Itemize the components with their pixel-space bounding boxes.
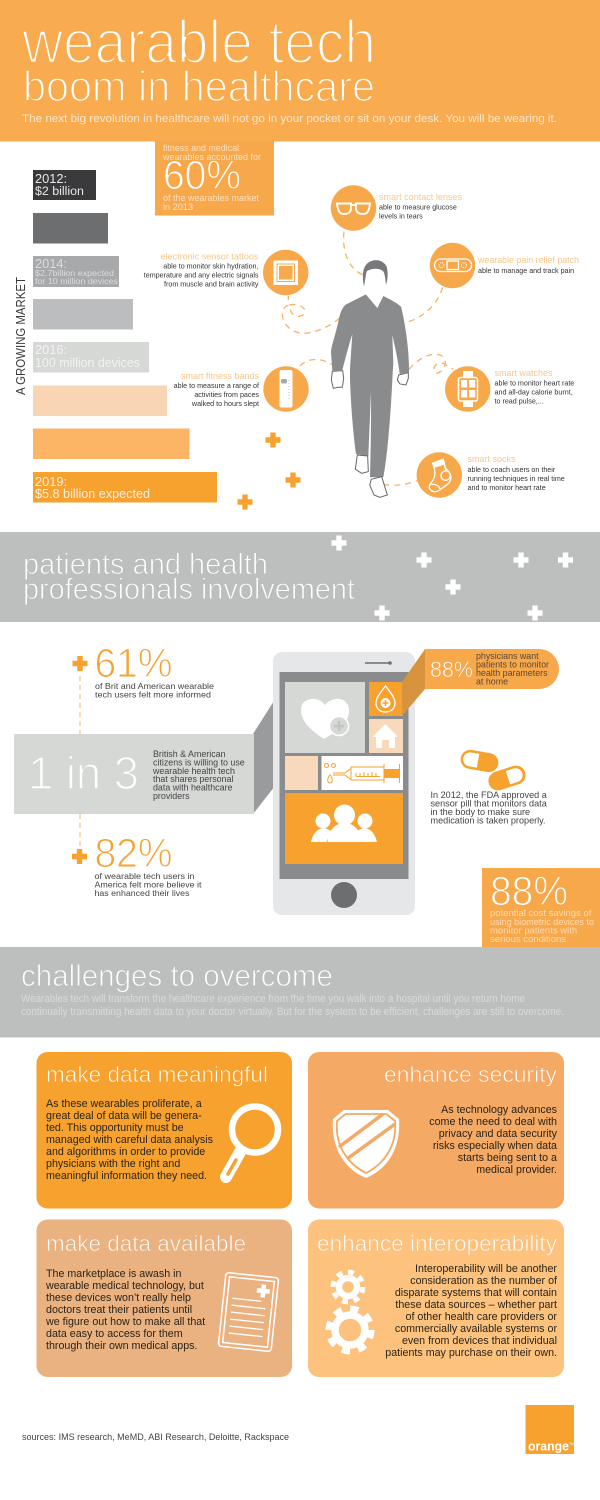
feature: smart watches: to read pulse,... bbox=[494, 398, 544, 406]
panel: make data available: make data available bbox=[46, 1231, 246, 1256]
feature: smart socks: running techniques in real time bbox=[468, 475, 565, 483]
body text: through their own medical apps. bbox=[46, 1340, 198, 1352]
body text: patients may purchase on their own. bbox=[385, 1347, 557, 1359]
dashed connectors bbox=[282, 232, 453, 485]
body text: ted. This opportunity must be bbox=[46, 1122, 184, 1134]
stat: 82%: America felt more believe it bbox=[94, 880, 202, 890]
body text: commercially available systems or bbox=[395, 1323, 557, 1335]
axis label: a growing market: A GROWING MARKET bbox=[13, 277, 28, 395]
body text: physicians with the right and bbox=[46, 1158, 180, 1170]
logo: orange bbox=[526, 1405, 574, 1454]
panel: make data available bbox=[36, 1220, 292, 1377]
intro text: continually transmitting health data to your doctor virtually. But for the system to be efficient, challenges are still to overcome. bbox=[21, 1006, 564, 1018]
feature: smart socks: able to coach users on their bbox=[468, 466, 556, 474]
callout: 60% of the wearables market: wearables accounted for bbox=[162, 152, 261, 162]
body text: Interoperability will be another bbox=[415, 1263, 557, 1275]
stat: 82%: of wearable tech users in bbox=[94, 871, 195, 881]
section band: challenges to overcome bbox=[0, 947, 600, 1038]
feature: electronic sensor tattoos: temperature and any electric signals bbox=[144, 272, 259, 280]
tile: syringe bbox=[322, 756, 403, 790]
callout: 88% cost savings bbox=[482, 868, 600, 947]
bar: 2012 bbox=[33, 170, 96, 200]
callout: 88% physicians: 88% bbox=[430, 657, 473, 682]
person silhouette bbox=[331, 260, 409, 497]
icon: fitness band bbox=[263, 366, 309, 412]
stat: 82%: 82% bbox=[94, 830, 172, 876]
body text: of other health care providers or bbox=[406, 1311, 557, 1323]
description: wearable health tech bbox=[152, 766, 235, 776]
callout: 88% physicians: patients to monitor bbox=[476, 660, 549, 670]
feature: smart fitness bands: walked to hours slept bbox=[191, 400, 259, 408]
icon: shield bbox=[333, 1110, 399, 1178]
panel: 1 in 3 bbox=[14, 682, 286, 814]
shoes bbox=[355, 455, 387, 497]
bar: 2016: 100 million devices bbox=[35, 356, 140, 370]
stat: 61%: of Brit and American wearable bbox=[95, 681, 214, 691]
icon: patch bbox=[430, 243, 475, 288]
callout: 88% physicians: at home bbox=[476, 676, 508, 686]
callout: 88% cost savings: using biometric devices to bbox=[490, 917, 594, 928]
stat: 61%: tech users felt more informed bbox=[95, 690, 211, 700]
sources: sources: IMS research, MeMD, ABI Research, Deloitte, Rackspace bbox=[22, 1432, 289, 1443]
tagline: The next big revolution in healthcare will not go in your pocket or sit on your desk. You will be wearing it. bbox=[22, 113, 557, 125]
body text: come the need to deal with bbox=[429, 1116, 557, 1128]
feature: smart watches: and all-day calorie burnt, bbox=[494, 388, 573, 396]
text: FDA sensor pill: In 2012, the FDA approved a bbox=[430, 790, 548, 800]
logo: orange: TM bbox=[569, 1442, 574, 1446]
text: FDA sensor pill: in the body to make sure bbox=[430, 807, 530, 817]
feature: electronic sensor tattoos bbox=[144, 250, 308, 295]
body text bbox=[385, 1263, 557, 1359]
bar: 2012: $2 billion bbox=[35, 184, 84, 198]
panel: enhance interoperability bbox=[308, 1220, 564, 1377]
panel: make data meaningful: make data meaningful bbox=[46, 1062, 268, 1087]
callout: 88% physicians: physicians want bbox=[476, 651, 539, 661]
icon: medical document bbox=[218, 1272, 279, 1352]
intro text bbox=[21, 993, 564, 1018]
body text bbox=[429, 1104, 558, 1176]
icon: sensor pills bbox=[459, 748, 528, 793]
bar: 2016 bbox=[33, 342, 149, 372]
icon: glasses bbox=[331, 185, 376, 231]
text: FDA sensor pill bbox=[430, 790, 548, 826]
callout: 60% of the wearables market: fitness and medical bbox=[163, 143, 239, 153]
feature: smart fitness bands: activities from paces bbox=[194, 391, 259, 399]
body text: consideration as the number of bbox=[410, 1275, 557, 1287]
description: providers bbox=[153, 791, 190, 801]
body text: risks especially when data bbox=[433, 1140, 557, 1152]
body text: and algorithms in order to provide bbox=[46, 1146, 205, 1158]
panel: 1 in 3: 1 in 3 bbox=[28, 747, 139, 799]
feature: wearable pain relief patch: able to manage and track pain bbox=[478, 267, 574, 275]
description: data with healthcare bbox=[153, 782, 232, 792]
heading bbox=[23, 548, 356, 606]
connector to phone bbox=[253, 682, 286, 814]
feature: wearable pain relief patch: wearable pain relief patch bbox=[477, 255, 579, 265]
title: boom in healthcare bbox=[23, 63, 375, 111]
text: FDA sensor pill: sensor pill that monitors data bbox=[430, 798, 548, 808]
feature: smart contact lenses bbox=[331, 185, 462, 231]
logo: orange: orange bbox=[528, 1440, 569, 1454]
callout: 88% physicians: health parameters bbox=[476, 668, 548, 678]
bar chart: growing market bbox=[33, 170, 217, 502]
callout: 60% of the wearables market: 60% bbox=[163, 152, 241, 198]
body text: great deal of data will be genera- bbox=[46, 1110, 202, 1122]
description: citizens is willing to use bbox=[153, 758, 245, 768]
bar: 2012: 2012: bbox=[35, 171, 67, 186]
feature: smart watches: able to monitor heart rate bbox=[494, 380, 574, 388]
callout: 88% cost savings: 88% bbox=[490, 868, 568, 914]
callout: 88% physicians bbox=[402, 649, 559, 716]
feature: smart socks: smart socks bbox=[468, 454, 516, 464]
body text bbox=[45, 1268, 205, 1352]
feature: electronic sensor tattoos: electronic sensor tattoos bbox=[160, 252, 259, 262]
head and hair bbox=[363, 260, 388, 308]
section band: patients and health professionals involvement bbox=[0, 532, 600, 622]
feature: smart socks: and to monitor heart rate bbox=[468, 484, 546, 492]
body text: even from devices that individual bbox=[402, 1335, 557, 1347]
icon: gears bbox=[328, 1272, 372, 1352]
bar: 2016: 2016: bbox=[35, 342, 67, 357]
body text: The marketplace is awash in bbox=[46, 1268, 181, 1280]
panel: make data meaningful bbox=[36, 1052, 292, 1208]
tile: people bbox=[285, 793, 403, 864]
hands bbox=[331, 371, 408, 388]
title bbox=[21, 8, 376, 111]
section band: challenges to overcome: challenges to overcome bbox=[21, 958, 333, 993]
tile: home bbox=[369, 719, 403, 753]
feature: smart contact lenses: levels in tears bbox=[379, 212, 423, 220]
tile: blood drop bbox=[369, 682, 403, 716]
icons: white plus marks bbox=[332, 536, 573, 620]
body text: starts being sent to a bbox=[458, 1152, 557, 1164]
text: FDA sensor pill: medication is taken properly. bbox=[430, 816, 546, 826]
description: British & American bbox=[153, 749, 226, 759]
panel: enhance interoperability: enhance interoperability bbox=[317, 1231, 558, 1256]
stat: 61% bbox=[72, 640, 214, 700]
feature: smart fitness bands: smart fitness bands bbox=[181, 371, 259, 381]
feature: smart watches bbox=[445, 366, 574, 412]
feature: smart fitness bands: able to measure a range of bbox=[174, 382, 259, 390]
body text: we figure out how to make all that bbox=[45, 1316, 205, 1328]
body text: privacy and data security bbox=[439, 1128, 558, 1140]
header panel bbox=[0, 0, 600, 142]
icon: watch bbox=[445, 366, 490, 412]
heading: professionals involvement bbox=[23, 573, 356, 606]
icon: sock bbox=[417, 452, 462, 498]
icon: magnifying glass bbox=[226, 1106, 278, 1177]
body text bbox=[46, 1098, 213, 1182]
feature: smart contact lenses: able to measure glucose bbox=[379, 204, 457, 212]
callout: 88% cost savings: potential cost savings of bbox=[490, 908, 592, 919]
body bbox=[331, 294, 409, 477]
body text: As technology advances bbox=[441, 1104, 557, 1116]
bar: 2019: $5.8 billion expected bbox=[35, 487, 150, 501]
panel: enhance security: enhance security bbox=[384, 1062, 558, 1087]
body text: medical provider. bbox=[476, 1164, 557, 1176]
body text: these data sources – whether part bbox=[395, 1299, 557, 1311]
feature: smart fitness bands bbox=[174, 366, 309, 412]
body text: meaningful information they need. bbox=[46, 1170, 207, 1182]
bar: 2014: $2.7billion expected bbox=[35, 268, 114, 278]
bar: 2019 bbox=[33, 472, 217, 502]
feature: smart watches: smart watches bbox=[494, 368, 553, 378]
callout: 60% of the wearables market bbox=[155, 141, 274, 216]
bar: 2014 bbox=[33, 256, 119, 287]
title: wearable tech bbox=[21, 8, 376, 76]
callout: 88% cost savings: serious conditions bbox=[490, 934, 566, 945]
description bbox=[152, 749, 245, 801]
dashed vertical connector bbox=[79, 676, 81, 850]
phone bbox=[273, 652, 415, 915]
body text: these devices won’t really help bbox=[46, 1292, 191, 1304]
body text: disparate systems that will contain bbox=[395, 1287, 557, 1299]
heading: patients and health bbox=[23, 548, 268, 581]
feature: smart contact lenses: smart contact lenses bbox=[379, 192, 462, 202]
tile: heart bbox=[285, 682, 365, 753]
icons: orange plus marks bbox=[238, 432, 300, 510]
feature: wearable pain relief patch bbox=[430, 243, 579, 288]
bar: 2014: 2014: bbox=[35, 256, 67, 271]
stat: 61%: 61% bbox=[94, 640, 172, 686]
body text: doctors treat their patients until bbox=[46, 1304, 192, 1316]
body text: wearable medical technology, but bbox=[45, 1280, 204, 1292]
callout: 60% of the wearables market: of the wearables market bbox=[163, 193, 259, 203]
body text: managed with careful data analysis bbox=[46, 1134, 213, 1146]
body text: data easy to access for them bbox=[46, 1328, 183, 1340]
feature: smart socks bbox=[417, 452, 565, 498]
callout: 88% cost savings: monitor patients with bbox=[490, 926, 577, 936]
bar: 2019: 2019: bbox=[35, 474, 67, 489]
stat: 82%: has enhanced their lives bbox=[94, 888, 190, 898]
body text: As these wearables proliferate, a bbox=[46, 1098, 202, 1110]
intro text: Wearables tech will transform the healthcare experience from the time you walk into a hospital until you return home bbox=[21, 993, 525, 1005]
panel: enhance security bbox=[308, 1052, 564, 1208]
bar: 2014: for 10 million devices bbox=[35, 276, 119, 286]
feature: electronic sensor tattoos: able to monitor skin hydration, bbox=[163, 262, 259, 270]
callout: 60% of the wearables market: in 2013 bbox=[163, 202, 193, 212]
description: that shares personal bbox=[153, 774, 233, 784]
icon: tattoo stamp bbox=[263, 250, 308, 295]
stat: 82% bbox=[72, 830, 202, 898]
feature: electronic sensor tattoos: from muscle and brain activity bbox=[164, 280, 259, 288]
